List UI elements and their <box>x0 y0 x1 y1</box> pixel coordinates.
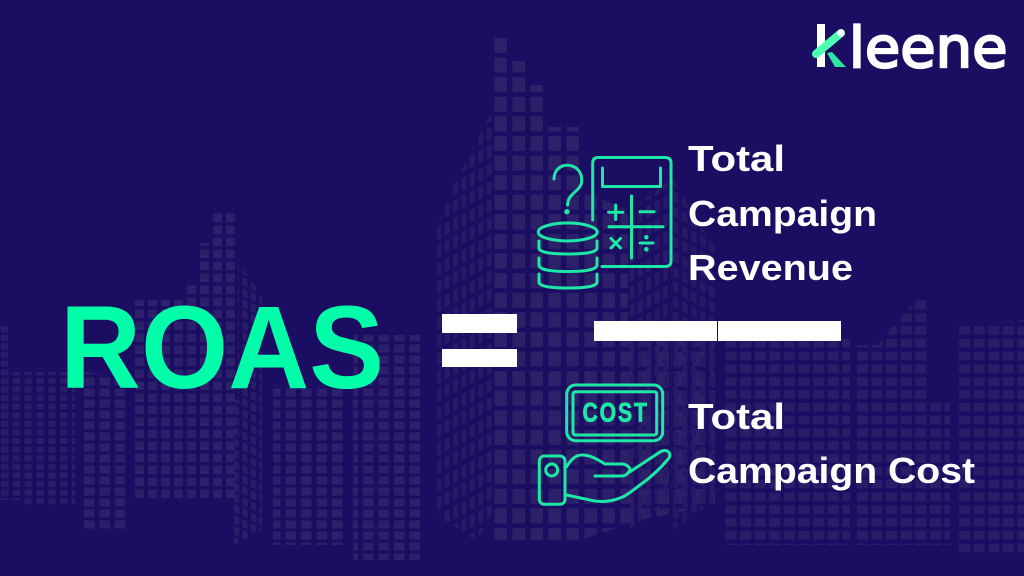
icon: cost tag and hand: COST <box>582 398 649 428</box>
label: Total Campaign Revenue: Campaign <box>688 193 877 234</box>
label: Total Campaign Cost: Campaign Cost <box>688 450 975 491</box>
label: Total Campaign Cost: Total <box>688 396 785 437</box>
icon: calculator and database <box>538 158 671 288</box>
label: Total Campaign Revenue: Total <box>688 138 785 179</box>
label: Total Campaign Revenue <box>688 138 877 288</box>
equals sign <box>442 314 517 367</box>
title: ROAS: ROAS <box>60 282 384 414</box>
label: Total Campaign Revenue: Revenue <box>688 247 853 288</box>
icon: cost tag and hand <box>539 385 670 504</box>
fraction bar <box>594 321 841 341</box>
label: Total Campaign Cost <box>688 396 975 491</box>
